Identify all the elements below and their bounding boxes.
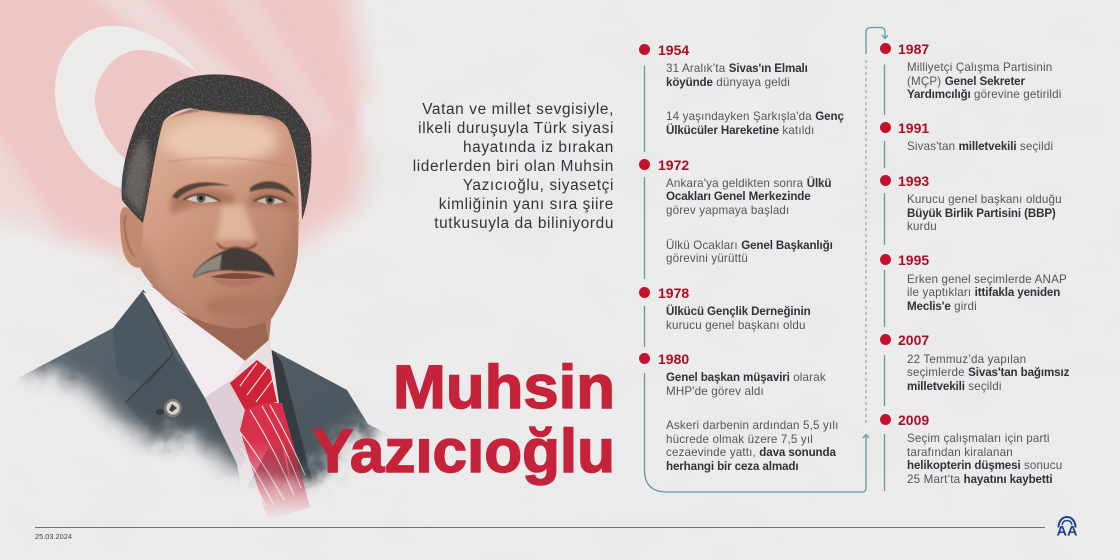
1991 entry — [880, 120, 1053, 153]
1987 entry: Milliyetçi Çalışma Partisinin — [907, 61, 1052, 74]
1987 entry: (MÇP) Genel Sekreter — [907, 75, 1025, 88]
1954 entry — [639, 42, 844, 137]
1978 entry: kurucu genel başkanı oldu — [666, 319, 806, 332]
1980 entry — [639, 351, 839, 473]
2009 entry: tarafından kiralanan — [907, 446, 1013, 459]
2009 entry — [880, 412, 1062, 486]
1995 entry — [880, 252, 1067, 313]
hair — [122, 74, 311, 223]
1972 entry: görev yapmaya başladı — [666, 204, 789, 217]
icon: AA logo — [1056, 516, 1078, 538]
facial shading — [140, 116, 305, 330]
title — [312, 353, 615, 486]
1954 entry: Ülkücüler Hareketine katıldı — [666, 124, 814, 137]
intro paragraph: ilkeli duruşuyla Türk siyasi — [418, 120, 614, 136]
timeline left column — [639, 42, 844, 473]
moustache — [193, 248, 275, 278]
1980 entry: 1980 — [658, 351, 689, 367]
1972 entry: Ocakları Genel Merkezinde — [666, 190, 811, 203]
1987 entry: 1987 — [898, 41, 929, 57]
1995 entry: ile yaptıkları ittifakla yeniden — [907, 286, 1060, 299]
intro paragraph: hayatında iz bırakan — [463, 138, 614, 156]
2007 entry: 2007 — [898, 332, 929, 348]
1954 entry: 14 yaşındayken Şarkışla'da Genç — [666, 110, 844, 123]
portrait of Muhsin Yazıcıoğlu — [18, 74, 394, 517]
2009 entry: 25 Mart’ta hayatını kaybetti — [907, 473, 1052, 486]
1978 entry: 1978 — [658, 285, 689, 301]
footer rule — [35, 527, 1045, 528]
intro paragraph: Yazıcıoğlu, siyasetçi — [463, 176, 614, 194]
1980 entry: MHP'de görev aldı — [666, 385, 764, 398]
2007 entry: 22 Temmuz’da yapılan — [907, 352, 1026, 366]
1972 entry — [639, 157, 833, 265]
1972 entry: 1972 — [658, 157, 689, 173]
1978 entry: Ülkücü Gençlik Derneğinin — [666, 305, 811, 318]
1995 entry: Erken genel seçimlerde ANAP — [907, 272, 1067, 286]
1980 entry: Genel başkan müşaviri olarak — [666, 371, 826, 384]
1993 entry: kurdu — [907, 220, 937, 233]
nose — [217, 243, 257, 249]
1972 entry: Ankara'ya geldikten sonra Ülkü — [666, 176, 831, 190]
flag crescent — [55, 26, 200, 189]
flag — [0, 0, 385, 300]
1991 entry: Sivas'tan milletvekili seçildi — [907, 140, 1053, 153]
1954 entry: köyünde dünyaya geldi — [666, 76, 790, 89]
1987 entry — [880, 41, 1062, 101]
lapel — [113, 290, 166, 377]
2007 entry — [880, 332, 1069, 393]
1972 entry: görevini yürüttü — [666, 252, 748, 265]
2009 entry: Seçim çalışmaları için parti — [907, 432, 1050, 445]
2007 entry: seçimlerde Sivas'tan bağımsız — [907, 366, 1069, 379]
1954 entry: 1954 — [658, 42, 689, 58]
neck — [150, 285, 272, 361]
1987 entry: Yardımcılığı görevine getirildi — [907, 88, 1062, 101]
eyes — [183, 194, 286, 204]
intro paragraph: Vatan ve millet sevgisiyle, — [422, 100, 614, 118]
1993 entry: Büyük Birlik Partisini (BBP) — [907, 207, 1056, 220]
1995 entry: Meclis'e girdi — [907, 300, 977, 313]
jacket and shirt — [18, 285, 394, 496]
1978 entry — [639, 285, 811, 332]
1991 entry: 1991 — [898, 120, 929, 136]
left ear — [120, 207, 146, 268]
1980 entry: herhangi bir ceza almadı — [666, 460, 798, 473]
2007 entry: milletvekili seçildi — [907, 380, 1002, 393]
1993 entry — [880, 173, 1062, 233]
1972 entry: Ülkü Ocakları Genel Başkanlığı — [666, 238, 833, 252]
mouth — [210, 273, 266, 279]
title: Muhsin — [393, 353, 615, 421]
eyebrows — [172, 182, 230, 199]
1995 entry: 1995 — [898, 252, 929, 268]
1980 entry: cezaevinde yattı, dava sonunda — [666, 446, 836, 459]
2009 entry: 2009 — [898, 412, 929, 428]
1993 entry: Kurucu genel başkanı olduğu — [907, 193, 1062, 206]
1980 entry: Askeri darbenin ardından 5,5 yılı — [666, 419, 839, 432]
intro paragraph: tutkusuyla da biliniyordu — [434, 214, 614, 232]
title: Yazıcıoğlu — [312, 417, 615, 485]
face — [140, 109, 299, 328]
intro paragraph: liderlerden biri olan Muhsin — [413, 158, 614, 174]
1980 entry: hücrede olmak üzere 7,5 yıl — [666, 433, 813, 446]
intro paragraph — [413, 100, 614, 232]
1993 entry: 1993 — [898, 173, 929, 189]
2009 entry: helikopterin düşmesi sonucu — [907, 459, 1062, 472]
intro paragraph: kimliğinin yanı sıra şiire — [439, 196, 614, 212]
tie — [230, 360, 310, 520]
1954 entry: 31 Aralık’ta Sivas'ın Elmalı — [666, 62, 808, 75]
lapel pin — [156, 399, 182, 417]
jacket — [18, 290, 394, 496]
date: 25.03.2024 — [35, 532, 72, 541]
shirt — [143, 292, 290, 495]
timeline right column — [880, 41, 1069, 486]
